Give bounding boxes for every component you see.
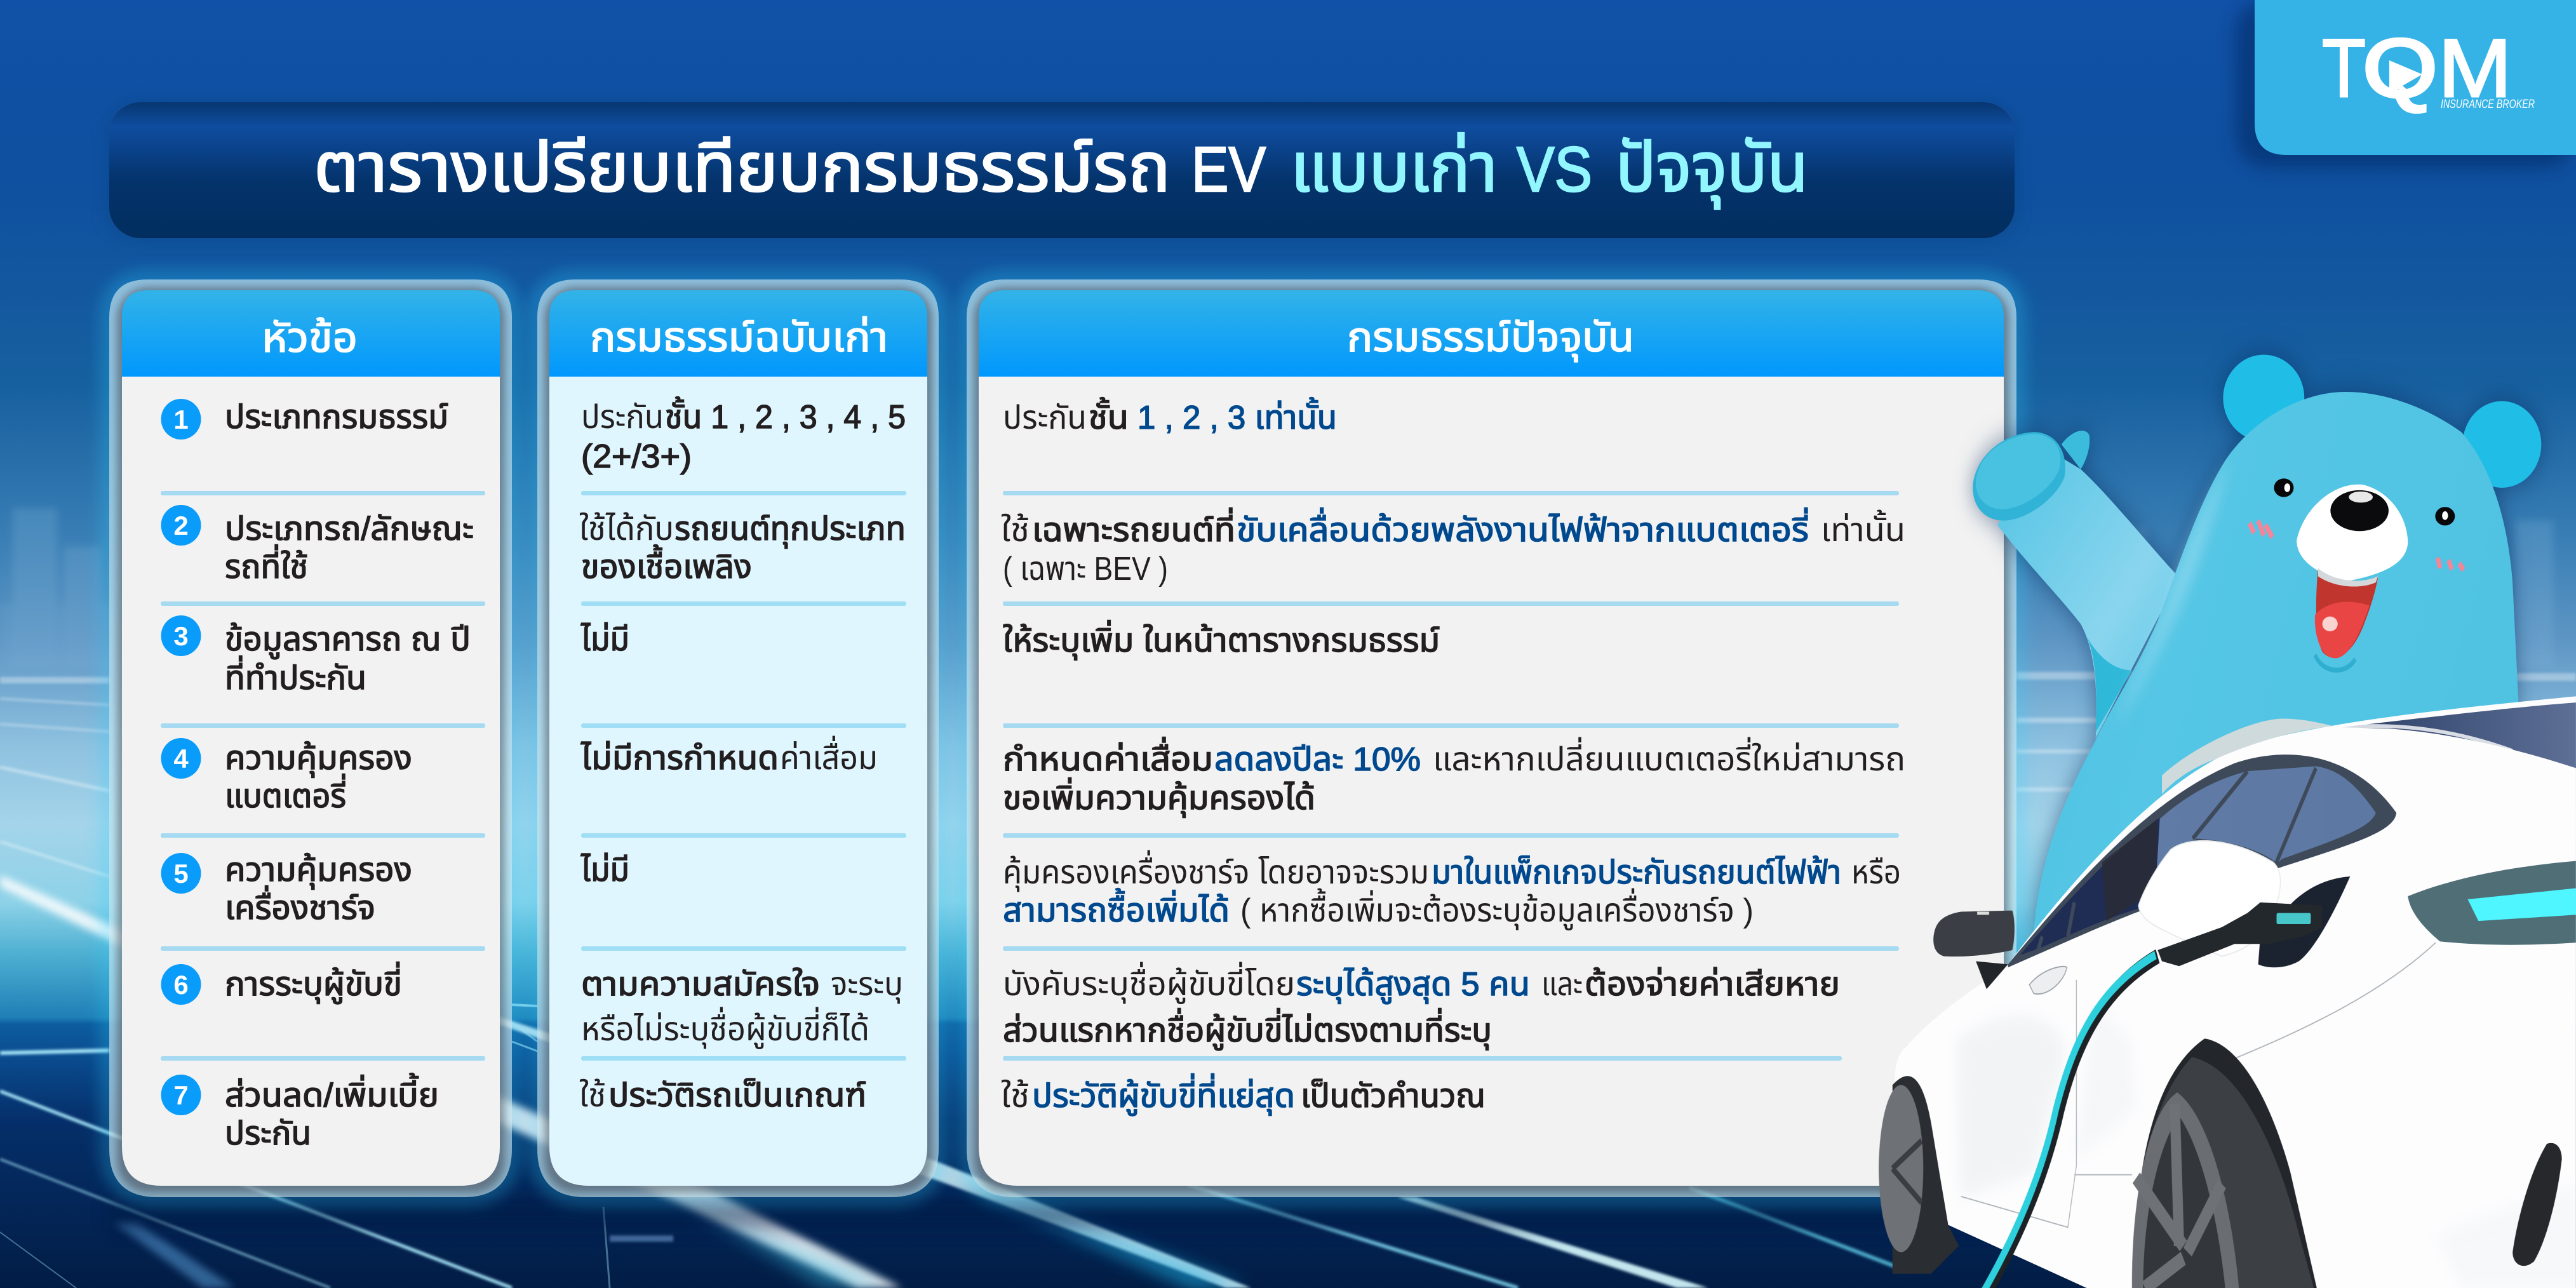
row 2 current: ขับเคลื่อนด้วยพลังงานไฟฟ้าจากแบตเตอรี่ bbox=[1237, 507, 1809, 549]
bear blush bbox=[2250, 521, 2464, 570]
heading: current policy: กรมธรรม์ปัจจุบัน bbox=[1347, 314, 1634, 362]
title panel bbox=[109, 102, 2015, 238]
logo badge bbox=[2236, 0, 2576, 168]
row 1 old: ชั้น 1 , 2 , 3 , 4 , 5 bbox=[665, 396, 906, 436]
row 1 old bbox=[581, 396, 906, 475]
car windows bbox=[2008, 755, 2396, 967]
row 7 current: ประวัติผู้ขับขี่ที่แย่สุด bbox=[1032, 1073, 1295, 1116]
row 2 current: ใช้ bbox=[1001, 512, 1030, 549]
row 1 old: ประกัน bbox=[581, 399, 664, 436]
panel: current policy column bbox=[959, 273, 2026, 1207]
charging port bbox=[2258, 876, 2350, 967]
row 6 current: ต้องจ่ายค่าเสียหาย bbox=[1585, 966, 1840, 1003]
heading: old policy: กรมธรรม์ฉบับเก่า bbox=[590, 314, 888, 360]
row 6 current: และ bbox=[1541, 966, 1583, 1003]
row 1 topic: 1 bbox=[173, 405, 189, 434]
row 7 old: ประวัติรถเป็นเกณฑ์ bbox=[608, 1077, 866, 1114]
fuel door bbox=[2138, 841, 2281, 956]
row 1 current: ชั้น bbox=[1089, 397, 1129, 436]
title text: ปัจจุบัน bbox=[1616, 129, 1808, 209]
bear ears bbox=[2223, 354, 2541, 488]
row 2 old: รถยนต์ทุกประเภท bbox=[674, 511, 906, 549]
row 2 old: ใช้ได้กับ bbox=[579, 511, 674, 547]
logo wordmark bbox=[2322, 22, 2535, 114]
logo wordmark: M bbox=[2438, 22, 2512, 114]
bear body bbox=[2034, 392, 2519, 936]
car body lines bbox=[1961, 943, 2436, 1228]
row 6 topic: 6 bbox=[173, 970, 189, 1000]
row 5 old: ไม่มี bbox=[580, 852, 629, 889]
row 5 current bbox=[1003, 850, 1901, 930]
rear vent bbox=[2512, 1143, 2562, 1266]
row 6 current: บังคับระบุชื่อผู้ขับขี่โดย bbox=[1003, 962, 1295, 1004]
row 5 current: คุ้มครองเครื่องชาร์จ โดยอาจจะรวม bbox=[1003, 850, 1429, 892]
charging cable bbox=[1983, 955, 2157, 1288]
title text: แบบเก่า bbox=[1291, 129, 1498, 206]
row 2 current: เฉพาะรถยนต์ที่ bbox=[1032, 507, 1235, 549]
row 5 topic: 5 bbox=[173, 859, 189, 889]
row 2 topic: รถที่ใช้ bbox=[225, 544, 308, 586]
row 4 old: ค่าเสื่อม bbox=[780, 735, 878, 777]
row 2 current: ( เฉพาะ BEV ) bbox=[1003, 551, 1168, 587]
row 5 current: หรือ bbox=[1851, 854, 1901, 891]
row 6 topic bbox=[161, 962, 402, 1005]
car body bbox=[1895, 696, 2576, 1288]
row 5 current: สามารถซื้อเพิ่มได้ bbox=[1003, 888, 1230, 929]
row 4 topic: แบตเตอรี่ bbox=[225, 774, 346, 815]
row 2 old bbox=[579, 511, 906, 586]
front wheel bbox=[1879, 1076, 1959, 1274]
row 4 topic: 4 bbox=[173, 744, 189, 774]
logo wordmark: T bbox=[2322, 22, 2366, 114]
tail lamp bbox=[2408, 861, 2576, 945]
logo wordmark: INSURANCE BROKER bbox=[2441, 98, 2535, 111]
logo wordmark: Q bbox=[2363, 22, 2438, 114]
row 2 topic: 2 bbox=[173, 511, 189, 540]
row 7 topic bbox=[161, 1073, 439, 1152]
door handle bbox=[2029, 967, 2067, 994]
row 5 current: มาในแพ็กเกจประกันรถยนต์ไฟฟ้า bbox=[1432, 854, 1841, 891]
row 7 topic: 7 bbox=[173, 1080, 189, 1110]
row 7 topic: ประกัน bbox=[225, 1115, 311, 1152]
bear eyes bbox=[2274, 478, 2455, 525]
row 4 current bbox=[1003, 737, 1905, 818]
row 4 topic bbox=[161, 738, 412, 815]
row dividers bbox=[581, 491, 906, 1061]
car roof glass bbox=[2342, 702, 2576, 768]
row 6 current: ส่วนแรกหากชื่อผู้ขับขี่ไม่ตรงตามที่ระบุ bbox=[1003, 1008, 1492, 1050]
row 6 current bbox=[1003, 962, 1840, 1050]
charging plug bbox=[2157, 902, 2323, 966]
row dividers bbox=[1003, 491, 1899, 1061]
row 1 current: 1 , 2 , 3 เท่านั้น bbox=[1137, 397, 1337, 436]
row 7 current bbox=[1001, 1073, 1486, 1116]
row 4 topic: ความคุ้มครอง bbox=[225, 740, 412, 778]
row 2 topic: ประเภทรถ/ลักษณะ bbox=[225, 511, 474, 547]
car side shading bbox=[1957, 998, 2576, 1288]
bear snout and mouth bbox=[2297, 485, 2408, 670]
row 6 old bbox=[581, 966, 903, 1049]
electric car bbox=[1879, 696, 2576, 1288]
row 4 old bbox=[580, 735, 878, 777]
title text: ตารางเปรียบเทียบกรมธรรม์รถ bbox=[314, 129, 1171, 206]
light streak bbox=[0, 875, 902, 1288]
title text bbox=[314, 129, 1808, 209]
row 6 old: หรือไม่ระบุชื่อผู้ขับขี่ก็ได้ bbox=[581, 1007, 869, 1049]
row 7 current: เป็นตัวคำนวณ bbox=[1301, 1078, 1486, 1115]
row 3 topic: 3 bbox=[173, 621, 189, 651]
row 3 current: ให้ระบุเพิ่ม ในหน้าตารางกรมธรรม์ bbox=[1003, 620, 1440, 661]
row 6 topic: การระบุผู้ขับขี่ bbox=[225, 962, 402, 1004]
title text: VS bbox=[1517, 134, 1592, 205]
row 3 topic bbox=[161, 615, 471, 697]
row 5 topic: เครื่องชาร์จ bbox=[225, 885, 375, 927]
row 3 old: ไม่มี bbox=[580, 621, 629, 658]
mascot: blue bear bbox=[1973, 354, 2541, 936]
heading: topics: หัวข้อ bbox=[262, 315, 358, 361]
row 4 old: ไม่มีการกำหนด bbox=[580, 740, 779, 777]
row 5 topic: ความคุ้มครอง bbox=[225, 852, 412, 890]
panel: old policy column bbox=[527, 273, 946, 1207]
row 1 current bbox=[1003, 397, 1337, 436]
row 1 topic: ประเภทกรมธรรม์ bbox=[225, 399, 448, 436]
row 1 old: (2+/3+) bbox=[581, 438, 692, 475]
rear wheel bbox=[2132, 1038, 2317, 1288]
row 6 current: ระบุได้สูงสุด 5 คน bbox=[1296, 966, 1530, 1004]
row dividers bbox=[161, 491, 485, 1061]
row 6 old: จะระบุ bbox=[831, 966, 903, 1004]
row 1 current: ประกัน bbox=[1003, 399, 1087, 436]
row 3 topic: ข้อมูลราคารถ ณ ปี bbox=[225, 621, 471, 659]
row 3 topic: ที่ทำประกัน bbox=[225, 655, 366, 697]
row 2 current bbox=[1001, 507, 1905, 587]
panel: topics column bbox=[102, 273, 521, 1207]
row 4 current: กำหนดค่าเสื่อม bbox=[1003, 737, 1213, 778]
row 7 current: ใช้ bbox=[1001, 1078, 1030, 1115]
row 5 topic bbox=[161, 852, 412, 927]
row 7 topic: ส่วนลด/เพิ่มเบี้ย bbox=[225, 1073, 439, 1114]
row 5 current: ( หากซื้อเพิ่มจะต้องระบุข้อมูลเครื่องชาร์จ ) bbox=[1240, 888, 1754, 930]
bear arm and hand bbox=[1973, 431, 2179, 739]
side mirror bbox=[1933, 911, 2015, 989]
row 2 old: ของเชื้อเพลิง bbox=[581, 544, 752, 586]
row 6 old: ตามความสมัครใจ bbox=[581, 966, 820, 1003]
row 4 current: และหากเปลี่ยนแบตเตอรี่ใหม่สามารถ bbox=[1433, 737, 1905, 778]
row 4 current: ลดลงปีละ 10% bbox=[1214, 741, 1421, 778]
title text: EV bbox=[1191, 134, 1266, 205]
row 4 current: ขอเพิ่มความคุ้มครองได้ bbox=[1003, 777, 1315, 818]
row 2 current: เท่านั้น bbox=[1821, 509, 1905, 549]
row 7 old: ใช้ bbox=[579, 1077, 606, 1114]
row 2 topic bbox=[161, 505, 474, 586]
